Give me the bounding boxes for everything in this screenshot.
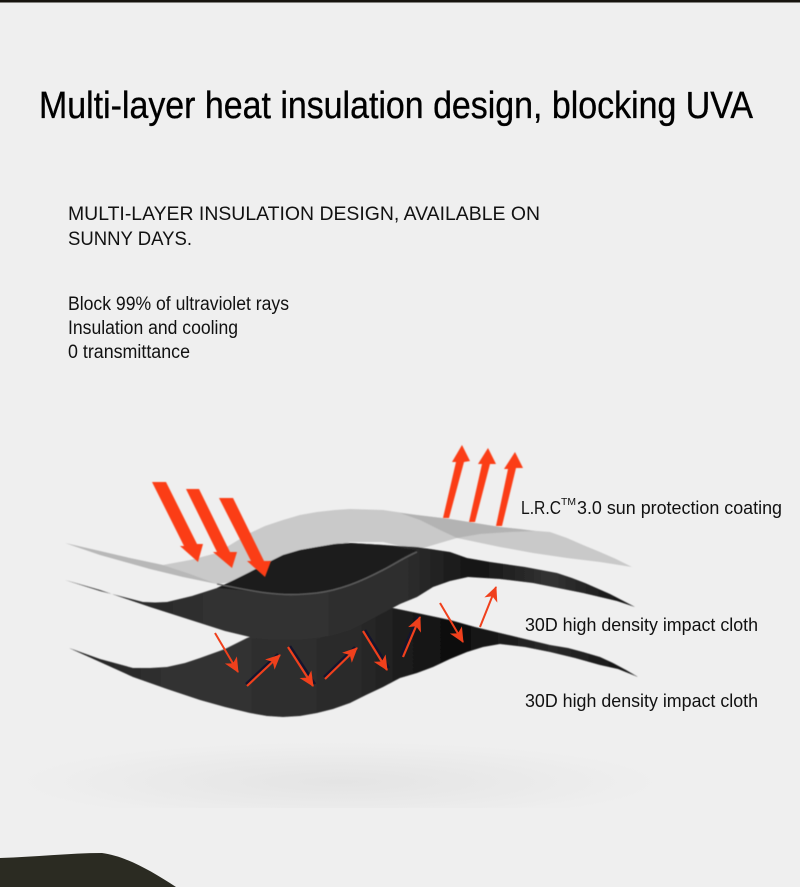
darker inner fold: [217, 543, 417, 595]
arrow: heat b: [246, 654, 280, 686]
layer diagram: [65, 509, 638, 717]
top dark bar: [0, 0, 800, 2]
grey wing tip: [65, 543, 217, 584]
subheading: SUNNY DAYS.: [68, 229, 192, 250]
fold highlight line: [217, 552, 417, 594]
subheading: [68, 204, 540, 250]
arrow: incoming sunlight 3: [219, 498, 271, 577]
label: coating: L.R.C: [521, 497, 561, 518]
arrow: incoming sunlight 2: [186, 489, 237, 568]
arrow: heat f: [401, 616, 420, 657]
arrow: heat c: [288, 646, 315, 686]
arrow: heat g: [440, 603, 463, 642]
arrow: reflected sunlight 1: [443, 445, 470, 518]
arrow: reflected sunlight 3: [496, 452, 523, 526]
arrow: heat a: [215, 633, 238, 672]
small heat arrows: [215, 587, 496, 686]
feature list: [68, 294, 289, 363]
arrow: heat h: [480, 587, 496, 627]
arrow: heat d: [324, 647, 357, 679]
feature list: Block 99% of ultraviolet rays: [68, 294, 289, 315]
feature list: 0 transmittance: [68, 342, 190, 363]
fabric layer: bottom impact cloth: [69, 608, 638, 717]
label: coating: 3.0 sun protection coating: [577, 497, 782, 518]
feature list: Insulation and cooling: [68, 318, 238, 339]
floor shadow: [255, 772, 426, 792]
arrow: incoming sunlight 1: [152, 482, 203, 562]
arrow: heat e: [363, 630, 389, 670]
fabric layer: middle impact cloth: [65, 543, 635, 640]
label: bottom cloth: 30D high density impact cloth: [525, 690, 758, 711]
label: middle cloth: 30D high density impact cloth: [525, 614, 758, 635]
bottom product edge: [0, 853, 176, 887]
subheading: MULTI-LAYER INSULATION DESIGN, AVAILABLE ON: [68, 204, 540, 225]
fabric layer: grey sun protection coating: [65, 509, 632, 584]
arrow: reflected sunlight 2: [469, 448, 496, 522]
label: coating: TM: [561, 497, 576, 508]
